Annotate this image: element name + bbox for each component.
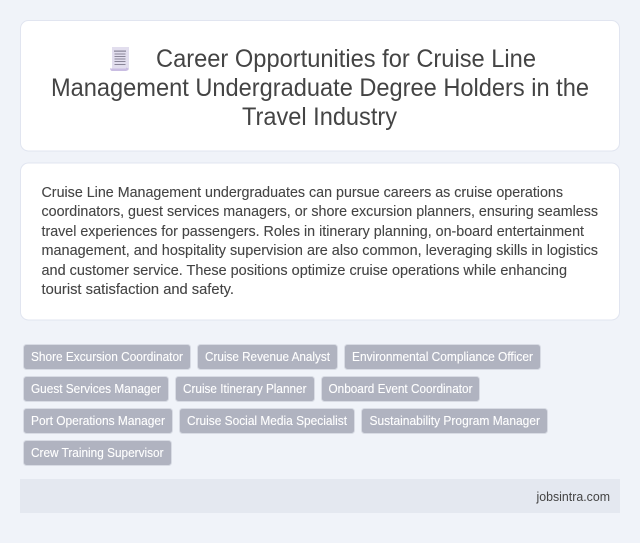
title: Travel Industry: [242, 103, 397, 131]
summary paragraph: Cruise Line Management undergraduates can pursue careers as cruise operations: [42, 185, 563, 201]
footer source: jobsintra.com: [536, 490, 610, 504]
summary paragraph: travel experiences for passengers. Roles in itinerary planning, on-board entertainment: [42, 224, 584, 240]
tag: Onboard Event Coordinator: [328, 381, 473, 396]
summary paragraph: management, and hospitality supervision are also common, leveraging skills in logistics: [42, 243, 598, 259]
career tags: [24, 344, 548, 466]
tag: Cruise Social Media Specialist: [187, 413, 347, 428]
title: Management Undergraduate Degree Holders in the: [51, 74, 589, 102]
tag: Port Operations Manager: [31, 413, 166, 428]
tag: [362, 408, 548, 434]
tag: [180, 408, 354, 434]
tag: [176, 376, 314, 402]
summary paragraph: [42, 185, 598, 298]
tag: Shore Excursion Coordinator: [31, 349, 184, 364]
tag: Sustainability Program Manager: [370, 413, 541, 428]
tag: [24, 408, 172, 434]
icon: paper scroll: [110, 47, 129, 71]
title: [51, 45, 589, 131]
summary paragraph: tourist satisfaction and safety.: [42, 282, 234, 298]
tag: Cruise Itinerary Planner: [183, 381, 307, 396]
tag: Cruise Revenue Analyst: [205, 349, 330, 364]
tag: [24, 376, 168, 402]
tag: Environmental Compliance Officer: [352, 349, 534, 364]
footer bar: [20, 479, 620, 513]
panel: title header: [20, 20, 620, 151]
tag: [322, 376, 480, 402]
title: Career Opportunities for Cruise Line: [156, 45, 536, 73]
tag: [344, 344, 540, 370]
tag: [24, 344, 190, 370]
tag: Crew Training Supervisor: [31, 445, 164, 460]
tag: [24, 440, 172, 466]
tag: [198, 344, 338, 370]
tag: Guest Services Manager: [31, 381, 162, 396]
panel: summary text: [20, 163, 620, 320]
summary paragraph: and customer service. These positions optimize cruise operations while enhancing: [42, 263, 567, 279]
summary paragraph: coordinators, guest services managers, or shore excursion planners, ensuring seamless: [42, 204, 598, 220]
